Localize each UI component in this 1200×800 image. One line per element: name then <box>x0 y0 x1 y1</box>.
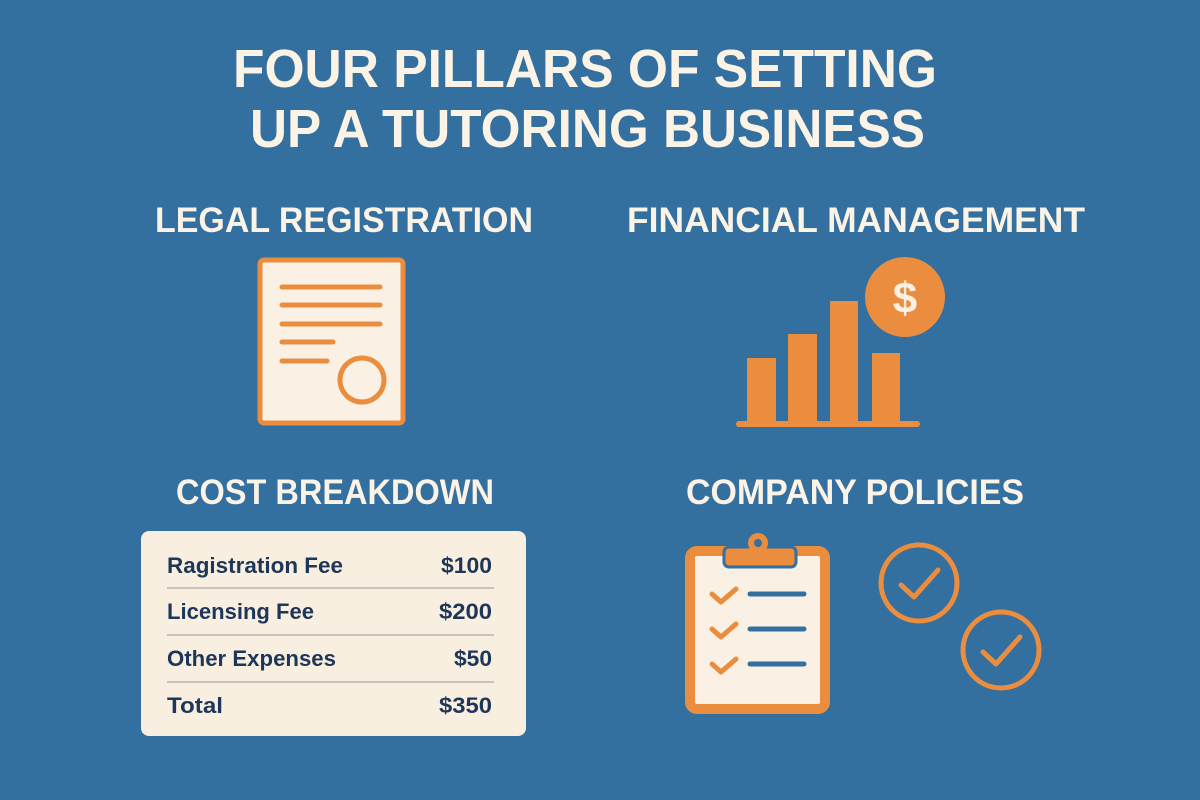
icon: check circles <box>881 545 1039 688</box>
panel: cost table: $200 <box>439 599 492 624</box>
panel: cost table: Other Expenses <box>167 646 336 671</box>
icon: clipboard <box>690 533 825 709</box>
icon: bar chart with dollar coin: $ <box>893 274 917 323</box>
panel: cost table <box>141 531 526 736</box>
panel: cost table: Total <box>167 693 223 718</box>
heading: cost breakdown: COST BREAKDOWN <box>176 473 494 512</box>
icon: bar chart with dollar coin <box>736 257 945 427</box>
panel: cost table: Ragistration Fee <box>167 553 343 578</box>
panel: cost table: $100 <box>441 553 492 578</box>
panel: cost table: $350 <box>439 693 492 718</box>
panel: cost table: $50 <box>454 646 492 671</box>
title: UP A TUTORING BUSINESS <box>250 99 925 159</box>
icon: document <box>260 260 403 423</box>
heading: company policies: COMPANY POLICIES <box>686 473 1024 512</box>
title <box>233 39 937 159</box>
panel: cost table: Licensing Fee <box>167 599 314 624</box>
title: FOUR PILLARS OF SETTING <box>233 39 937 99</box>
heading: legal registration: LEGAL REGISTRATION <box>155 201 533 240</box>
heading: financial management: FINANCIAL MANAGEMENT <box>627 201 1085 240</box>
